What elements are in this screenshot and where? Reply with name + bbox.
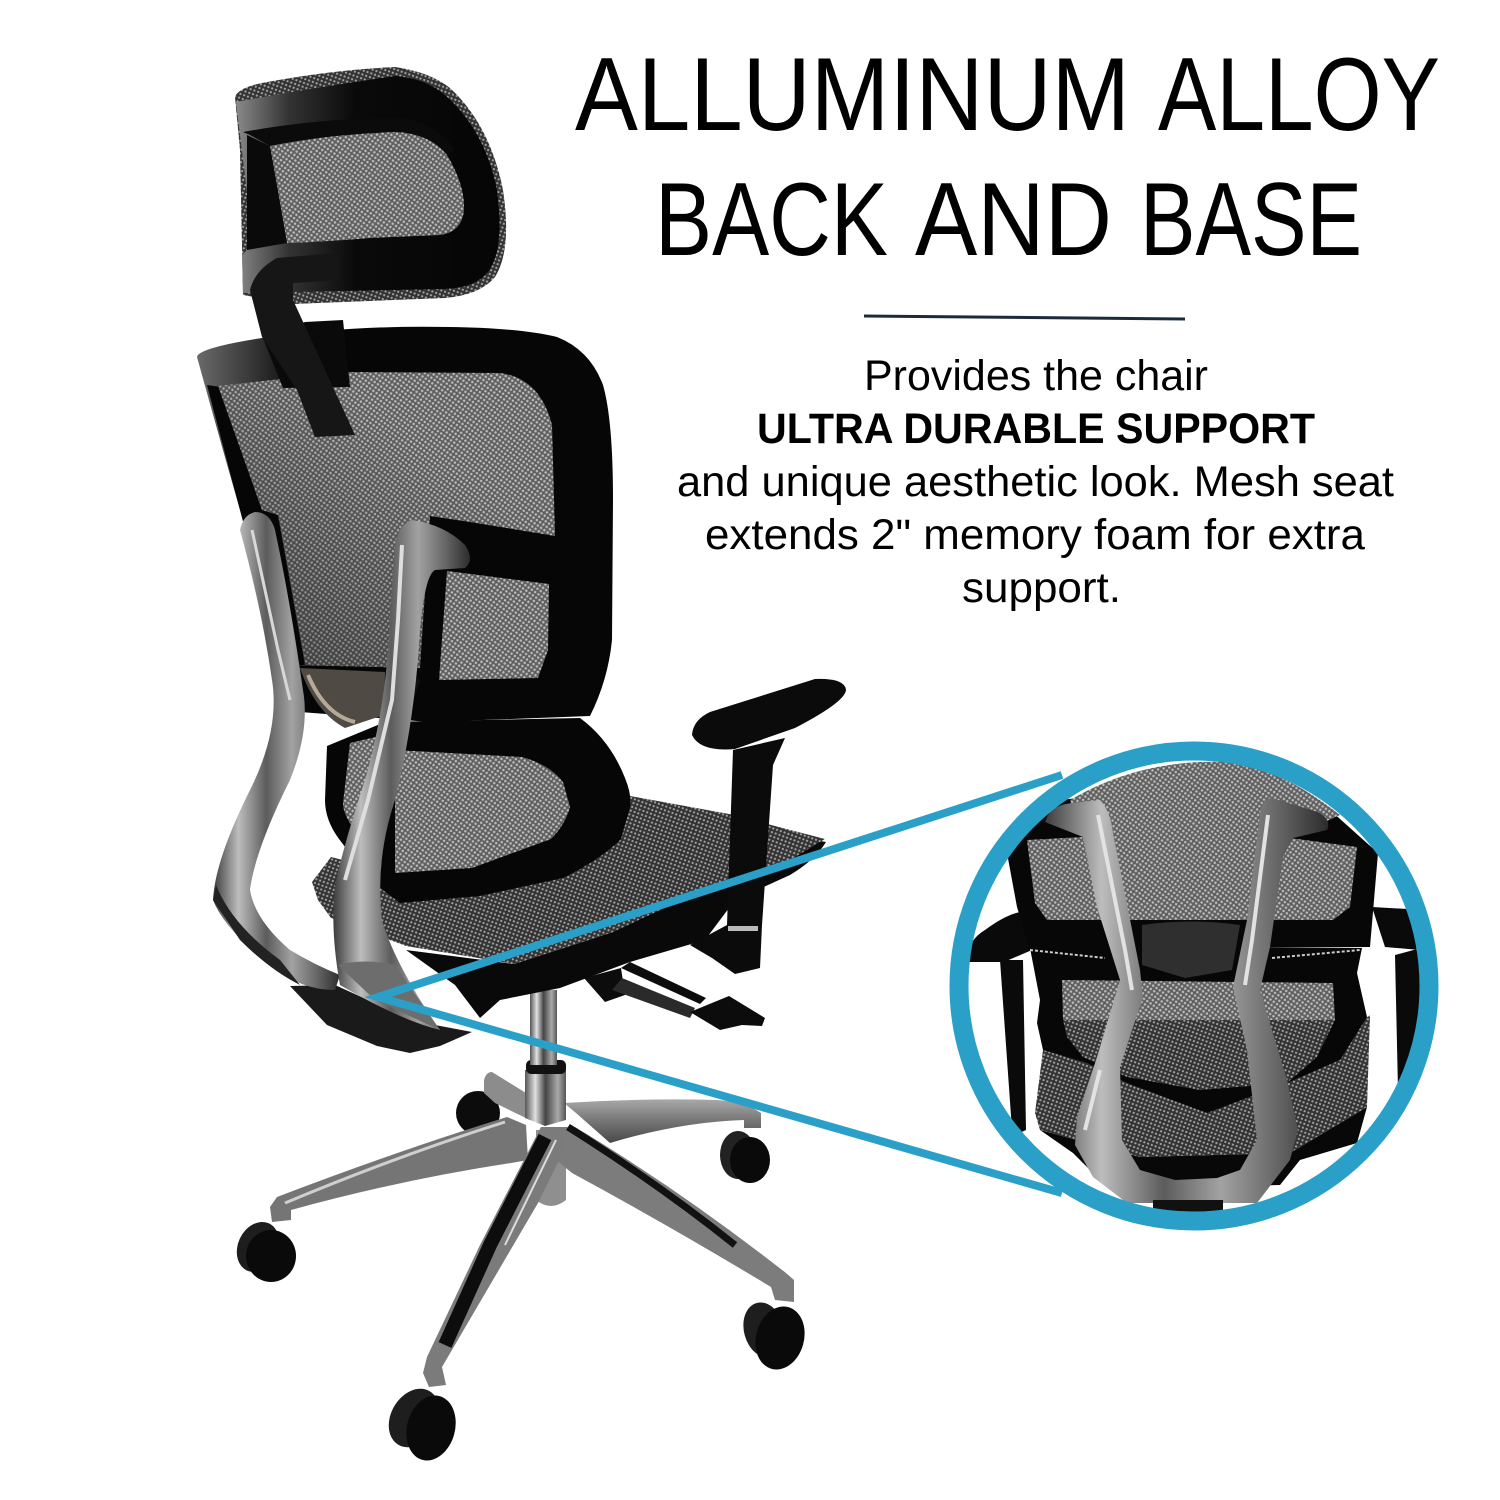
title line 2: AND bbox=[915, 162, 1112, 278]
inset left arm pad bbox=[968, 912, 1032, 962]
headrest dark inner frame bbox=[247, 135, 287, 250]
front base arm bbox=[423, 1127, 564, 1387]
description line 3: and unique aesthetic look. Mesh seat bbox=[677, 458, 1394, 506]
headrest upper inner frame bbox=[243, 118, 455, 155]
front right dark stripe bbox=[568, 1127, 735, 1245]
lower back mesh left bbox=[343, 735, 385, 840]
description line 5: support. bbox=[962, 564, 1121, 612]
seat underside bbox=[406, 836, 826, 1018]
callout lines bbox=[378, 775, 1062, 1193]
lumbar highlight bbox=[308, 675, 355, 722]
inset back mesh bbox=[1027, 762, 1357, 920]
title line 2: BACK bbox=[655, 162, 888, 278]
title line 1: ALLOY bbox=[1158, 37, 1440, 153]
title line 2: BASE bbox=[1140, 162, 1362, 278]
inset white background bbox=[966, 758, 1422, 1214]
back frame bbox=[197, 327, 613, 722]
headrest outer mesh edge bbox=[235, 67, 506, 304]
inset right arm pad bbox=[1373, 907, 1420, 1083]
headrest bracket holder bbox=[263, 320, 350, 388]
headrest stem bbox=[250, 253, 355, 437]
headrest bbox=[235, 67, 506, 437]
right arm highlight bbox=[345, 545, 402, 880]
rear caster bbox=[456, 1091, 500, 1135]
left caster bbox=[229, 1215, 296, 1282]
description line 1: Provides the chair bbox=[864, 352, 1208, 400]
lower back mesh bbox=[395, 750, 570, 873]
inset left post bbox=[1000, 960, 1026, 1135]
gas cylinder bbox=[530, 990, 557, 1065]
inset ring bbox=[959, 751, 1429, 1221]
left arm dark lower shade bbox=[213, 885, 300, 985]
front caster bbox=[379, 1380, 463, 1466]
headrest frame bbox=[236, 76, 500, 293]
column collar bbox=[525, 1070, 566, 1126]
front right caster bbox=[737, 1298, 811, 1375]
right arm foot shade bbox=[338, 962, 440, 1030]
arm pad bbox=[692, 679, 846, 749]
back-left base arm bbox=[484, 1072, 530, 1120]
title line 2 bbox=[655, 162, 1362, 278]
right rear caster bbox=[720, 1131, 770, 1183]
armrest bbox=[690, 679, 846, 974]
title bbox=[575, 37, 1440, 278]
back mesh lower window bbox=[439, 571, 549, 680]
front right base arm bbox=[552, 1127, 794, 1302]
inset dark lower mesh bbox=[1063, 1020, 1335, 1090]
rear pod under chrome bbox=[290, 985, 472, 1053]
inset back frame bbox=[1007, 795, 1378, 950]
bold statement: ULTRA DURABLE SUPPORT bbox=[757, 405, 1315, 453]
left arm highlight bbox=[285, 1122, 505, 1203]
inset lumbar pad bbox=[1142, 922, 1240, 978]
infographic canvas bbox=[197, 58, 1438, 1460]
silver ring bbox=[728, 926, 758, 931]
lumbar dark bbox=[380, 665, 420, 725]
front arm dark stripe bbox=[445, 1137, 545, 1345]
back mesh main bbox=[218, 372, 555, 668]
seat mechanism and lever bbox=[584, 962, 765, 1030]
left arm highlight bbox=[252, 530, 290, 700]
description text bbox=[677, 352, 1394, 612]
inset pod slot bbox=[1153, 1200, 1223, 1212]
collar cap bbox=[526, 1060, 566, 1074]
inset chrome highlights bbox=[1085, 815, 1268, 1130]
description line 4: extends 2" memory foam for extra bbox=[705, 511, 1365, 559]
inset under-seat black bbox=[1040, 1107, 1367, 1190]
divider bbox=[864, 316, 1185, 319]
inset light lower mesh bbox=[1062, 980, 1335, 1020]
left base arm bbox=[270, 1117, 528, 1222]
title line 1: ALLUMINUM bbox=[575, 37, 1130, 153]
front arm highlight bbox=[505, 1140, 556, 1245]
five-star aluminum base with casters bbox=[229, 1060, 811, 1466]
back left black strip bbox=[207, 385, 295, 668]
mesh seat bbox=[312, 796, 825, 964]
left chrome arm bbox=[213, 512, 340, 990]
lower column bbox=[536, 1130, 566, 1206]
arm post bbox=[690, 738, 785, 974]
lumbar pad bbox=[300, 668, 385, 728]
inset upper stitch bbox=[1030, 950, 1360, 958]
back mesh shade bbox=[218, 372, 555, 668]
headrest mesh window bbox=[270, 132, 464, 243]
right rear base arm bbox=[564, 1099, 761, 1143]
lower back frame bbox=[325, 718, 630, 903]
chair photo illustration bbox=[197, 67, 846, 1466]
inset chrome U frame bbox=[1045, 798, 1328, 1203]
inset lower frame bbox=[1030, 948, 1367, 1113]
zoomed inset circle bbox=[959, 751, 1429, 1221]
inset photo bbox=[968, 762, 1425, 1214]
right chrome arm bbox=[333, 520, 470, 1030]
inset seat bbox=[1035, 1015, 1370, 1157]
back black edge behind left chrome bbox=[262, 510, 305, 665]
